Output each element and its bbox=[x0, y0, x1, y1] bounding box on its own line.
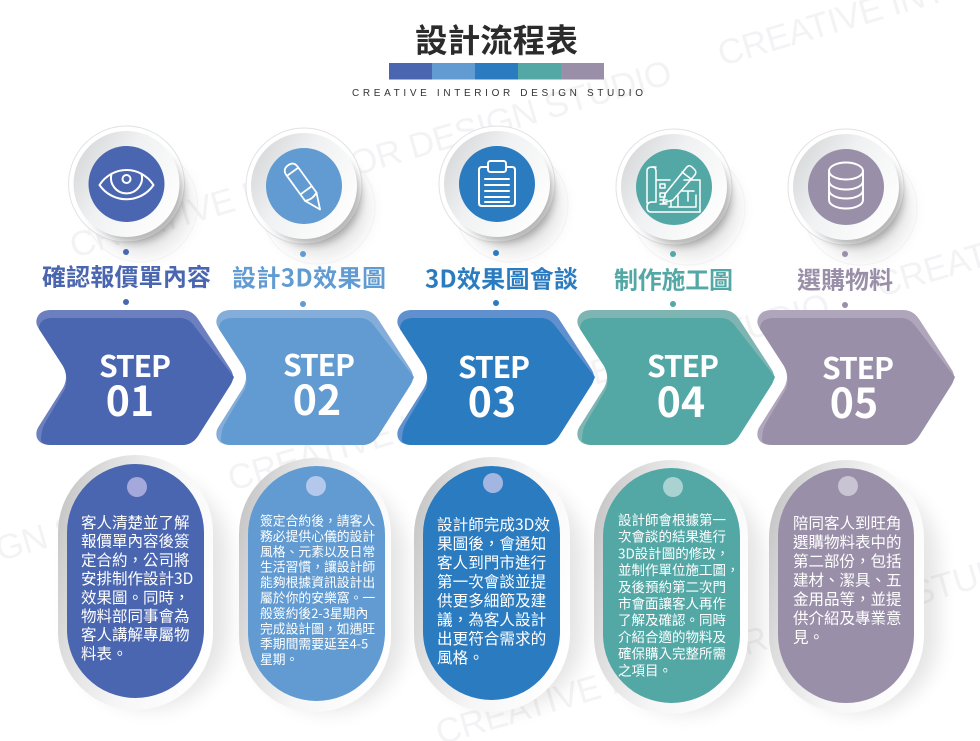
text block: 客人講解專屬物 bbox=[81, 623, 190, 645]
panel: step 3 description bbox=[414, 457, 584, 712]
text block: 安排制作設計3D bbox=[81, 567, 193, 589]
text block: 供更多細節及建 bbox=[437, 589, 546, 611]
text block: 報價單內容後簽 bbox=[81, 530, 190, 552]
heading: step 1: 確認報價單內容 bbox=[42, 258, 211, 292]
text block: 星期。 bbox=[260, 649, 298, 668]
watermark pattern: CREATIVE INTERIOR DESIGN STUDIO bbox=[223, 286, 834, 499]
heading: step 3: 3D效果圖會談 bbox=[425, 260, 578, 294]
arrow: step 4 bbox=[577, 310, 775, 445]
step label bbox=[458, 343, 530, 429]
text block: 客人清楚並了解 bbox=[81, 511, 190, 533]
step label: 05 bbox=[830, 370, 878, 430]
colour bar bbox=[389, 63, 604, 80]
step label bbox=[283, 341, 355, 427]
text block: 屬於你的安樂窩。一 bbox=[260, 588, 375, 606]
arrow: step 1 bbox=[36, 310, 234, 445]
panel: step 2 icon badge bbox=[246, 128, 375, 264]
text block: 議，為客人設計 bbox=[437, 608, 546, 630]
text block: 介紹合適的物料及 bbox=[618, 626, 726, 646]
text block: 簽定合約後，請客人 bbox=[260, 510, 375, 530]
text block: 陪同客人到旺角 bbox=[793, 512, 902, 534]
text block: 風格、元素以及日常 bbox=[260, 541, 375, 560]
text block: 效果圖。同時， bbox=[81, 586, 190, 608]
arrow: step 5 bbox=[757, 310, 955, 445]
text block: 物料部同事會為 bbox=[81, 604, 190, 626]
panel: step 4 description bbox=[594, 460, 762, 714]
text block: 次會談的結果進行 bbox=[618, 526, 726, 546]
text block: 風格。 bbox=[437, 646, 484, 668]
text block: 及後預約第二次門 bbox=[618, 576, 726, 596]
icon: clipboard bbox=[479, 161, 515, 206]
icon: blueprint bbox=[647, 166, 700, 212]
text block: 季期間需要延至4-5 bbox=[260, 634, 368, 653]
text block: 料表。 bbox=[81, 642, 128, 664]
icon: pencil bbox=[282, 161, 326, 214]
text block: 客人到門市進行 bbox=[437, 551, 546, 573]
step label bbox=[647, 342, 719, 429]
subtitle: CREATIVE INTERIOR DESIGN STUDIO bbox=[352, 88, 643, 99]
panel: step 3 icon badge bbox=[439, 126, 568, 262]
panel: step 1 description bbox=[58, 455, 228, 710]
text block: 之項目。 bbox=[618, 659, 672, 679]
panel: step 2 description bbox=[239, 458, 405, 712]
step label: STEP bbox=[99, 342, 171, 386]
text block: 定合約，公司將 bbox=[81, 548, 190, 570]
text block: 見。 bbox=[793, 626, 824, 648]
title: 設計流程表 bbox=[415, 15, 578, 62]
text block: 完成設計圖，如遇旺 bbox=[260, 618, 375, 637]
icon: database bbox=[829, 162, 863, 208]
text block: 供介紹及專業意 bbox=[793, 606, 902, 628]
text block: 金用品等，並提 bbox=[793, 588, 902, 610]
step label: STEP bbox=[458, 343, 530, 387]
text block: 第二部份，包括 bbox=[793, 550, 902, 572]
text block: 出更符合需求的 bbox=[437, 627, 546, 649]
arrow: step 2 bbox=[216, 310, 414, 445]
panel: step 5 description bbox=[769, 460, 938, 713]
icon: eye bbox=[100, 170, 154, 199]
text block: 建材、潔具、五 bbox=[793, 568, 902, 590]
heading: step 2: 設計3D效果圖 bbox=[232, 258, 386, 294]
panel: step 1 icon badge bbox=[68, 126, 198, 262]
text block: 選購物料表中的 bbox=[793, 530, 902, 552]
heading: step 4: 制作施工圖 bbox=[614, 260, 733, 296]
step label: 04 bbox=[657, 369, 705, 429]
watermark pattern: CREATIVE INTERIOR DESIGN STUDIO bbox=[65, 53, 676, 266]
step label: 02 bbox=[293, 367, 341, 427]
text block: 設計師完成3D效 bbox=[437, 513, 550, 535]
step label: STEP bbox=[647, 342, 719, 386]
text block: 務必提供心儀的設計 bbox=[260, 526, 375, 545]
text block: 生活習慣，讓設計師 bbox=[260, 557, 375, 576]
step label bbox=[99, 342, 171, 428]
text block: 第一次會談並提 bbox=[437, 570, 547, 592]
text block: 果圖後，會通知 bbox=[437, 532, 546, 554]
connector dots bbox=[123, 249, 848, 308]
text block: 確保購入完整所需 bbox=[618, 643, 726, 663]
panel: step 5 icon badge bbox=[788, 129, 917, 265]
arrow: step 3 bbox=[397, 310, 595, 445]
text block: 般簽約後2-3星期內 bbox=[260, 603, 368, 622]
step label: STEP bbox=[822, 344, 894, 388]
text block: 能夠根據資訊設計出 bbox=[260, 572, 375, 591]
step label bbox=[822, 344, 894, 430]
step label: STEP bbox=[283, 341, 355, 385]
text block: 市會面讓客人再作 bbox=[618, 592, 726, 612]
heading: step 5: 選購物料 bbox=[797, 260, 893, 296]
step label: 01 bbox=[106, 368, 154, 428]
text block: 並制作單位施工圖， bbox=[618, 559, 740, 579]
text block: 設計師會根據第一 bbox=[618, 509, 726, 529]
text block: 3D設計圖的修改， bbox=[618, 542, 729, 562]
panel: step 4 icon badge bbox=[616, 129, 745, 265]
step label: 03 bbox=[468, 369, 516, 429]
text block: 了解及確認。同時 bbox=[618, 609, 726, 629]
